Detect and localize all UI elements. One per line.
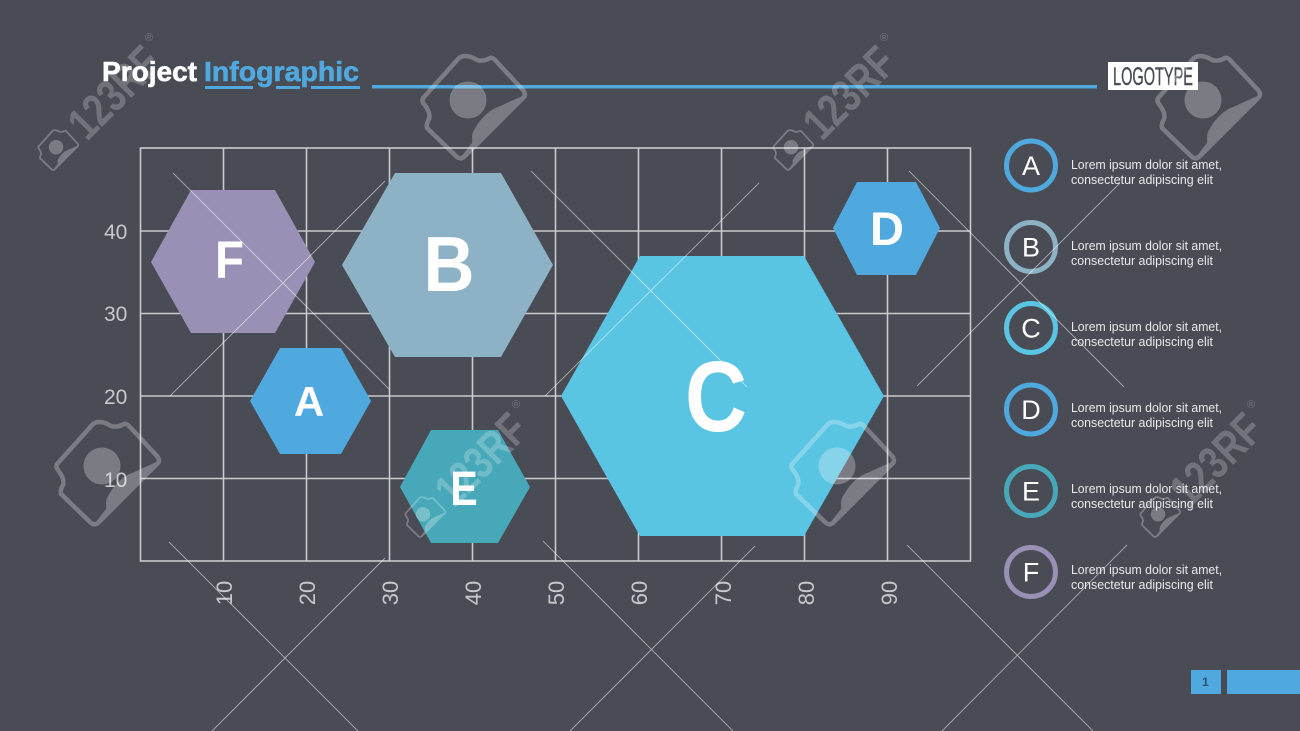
y axis labels: 10 (104, 469, 127, 492)
x axis labels: 70 (711, 581, 736, 605)
x axis labels: 60 (627, 581, 652, 605)
legend item F: F (1023, 558, 1039, 588)
y axis labels: 30 (104, 303, 127, 326)
hexagon F: F (215, 231, 244, 290)
legend item D: D (1021, 395, 1041, 425)
legend item B: Lorem ipsum dolor sit amet, (1071, 239, 1222, 253)
chart grid (140, 148, 970, 561)
hexagon D (833, 182, 940, 275)
hexagon F (151, 190, 315, 333)
legend item A: consectetur adipiscing elit (1071, 173, 1214, 187)
legend item A: A (1022, 151, 1040, 181)
legend item E: consectetur adipiscing elit (1071, 497, 1214, 511)
legend item C: Lorem ipsum dolor sit amet, (1071, 320, 1222, 334)
legend item D: Lorem ipsum dolor sit amet, (1071, 401, 1222, 415)
legend item D (1006, 385, 1222, 434)
x axis labels: 80 (794, 581, 819, 605)
hexagon B: B (424, 220, 474, 308)
legend item F: consectetur adipiscing elit (1071, 578, 1214, 592)
title: Infographic (204, 56, 359, 87)
header rule (372, 85, 1097, 88)
watermark egg icons (56, 56, 1260, 524)
x axis labels: 10 (212, 581, 237, 605)
hexagon D: D (870, 202, 904, 255)
legend item B: B (1022, 232, 1040, 262)
legend item D: consectetur adipiscing elit (1071, 416, 1214, 430)
legend item F: Lorem ipsum dolor sit amet, (1071, 563, 1222, 577)
legend item B (1006, 222, 1222, 272)
x axis labels: 40 (461, 581, 486, 605)
title: Project (102, 56, 197, 87)
legend item E: Lorem ipsum dolor sit amet, (1071, 482, 1222, 496)
watermark logos (38, 32, 1272, 537)
hexagon C: C (685, 341, 747, 453)
title (102, 56, 360, 89)
x axis labels: 90 (877, 581, 902, 605)
y axis labels: 20 (104, 386, 127, 409)
logotype: LOGOTYPE (1113, 63, 1193, 91)
legend item A: Lorem ipsum dolor sit amet, (1071, 158, 1222, 172)
hexagon C (561, 256, 884, 536)
page number tab (1191, 670, 1300, 694)
legend item A (1006, 141, 1222, 190)
x axis labels (212, 581, 902, 605)
legend item E: E (1022, 476, 1040, 506)
page number tab: 1 (1202, 675, 1209, 689)
hexagon B (342, 173, 553, 357)
y axis labels: 40 (104, 221, 127, 244)
x axis labels: 30 (378, 581, 403, 605)
logotype (1108, 62, 1198, 91)
y axis labels (104, 221, 127, 492)
legend item C: consectetur adipiscing elit (1071, 335, 1214, 349)
watermark crossing lines (169, 171, 1127, 731)
legend item C: C (1021, 314, 1041, 344)
x axis labels: 20 (295, 581, 320, 605)
hexagon E: E (450, 463, 478, 516)
hexagon A (250, 348, 371, 454)
hexagon E (400, 430, 530, 543)
legend item B: consectetur adipiscing elit (1071, 254, 1214, 268)
legend item C (1006, 304, 1222, 352)
x axis labels: 50 (544, 581, 569, 605)
legend item F (1006, 548, 1222, 596)
legend item E (1006, 466, 1222, 516)
hexagon A: A (294, 378, 324, 425)
